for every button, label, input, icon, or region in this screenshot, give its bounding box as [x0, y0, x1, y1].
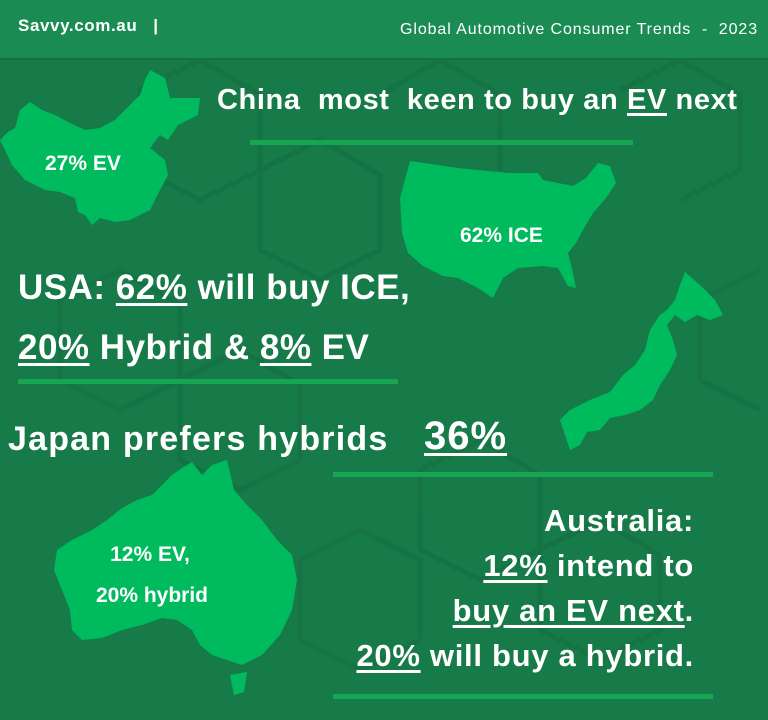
label: Australia stats: 12% EV, [110, 543, 190, 566]
text: USA [18, 268, 410, 367]
header bar [0, 0, 768, 60]
map: China [0, 70, 200, 225]
map: USA [400, 161, 616, 298]
text: Australia: Australia: [544, 503, 694, 538]
text: Australia: buy an EV next. [453, 593, 694, 628]
label: 27% EV: 27% EV [45, 152, 121, 175]
text: Japan: Japan prefers hybrids [8, 420, 388, 458]
header title: Global Automotive Consumer Trends - 2023 [400, 21, 758, 38]
text: Australia: 12% intend to [483, 548, 694, 583]
label: 62% ICE: 62% ICE [460, 224, 543, 247]
text: USA: 20% Hybrid & 8% EV [18, 328, 369, 367]
heading: China: China most keen to buy an EV next [217, 84, 738, 116]
map: Australia: 20% hybrid [96, 584, 208, 607]
stat: 36%: 36% [424, 414, 507, 458]
map: Australia [54, 460, 297, 695]
text: Australia [356, 503, 694, 673]
text: Australia: 20% will buy a hybrid. [356, 638, 694, 673]
brand: Savvy.com.au | [18, 16, 159, 35]
text: USA: USA: 62% will buy ICE, [18, 268, 410, 307]
map: Japan [560, 272, 723, 450]
